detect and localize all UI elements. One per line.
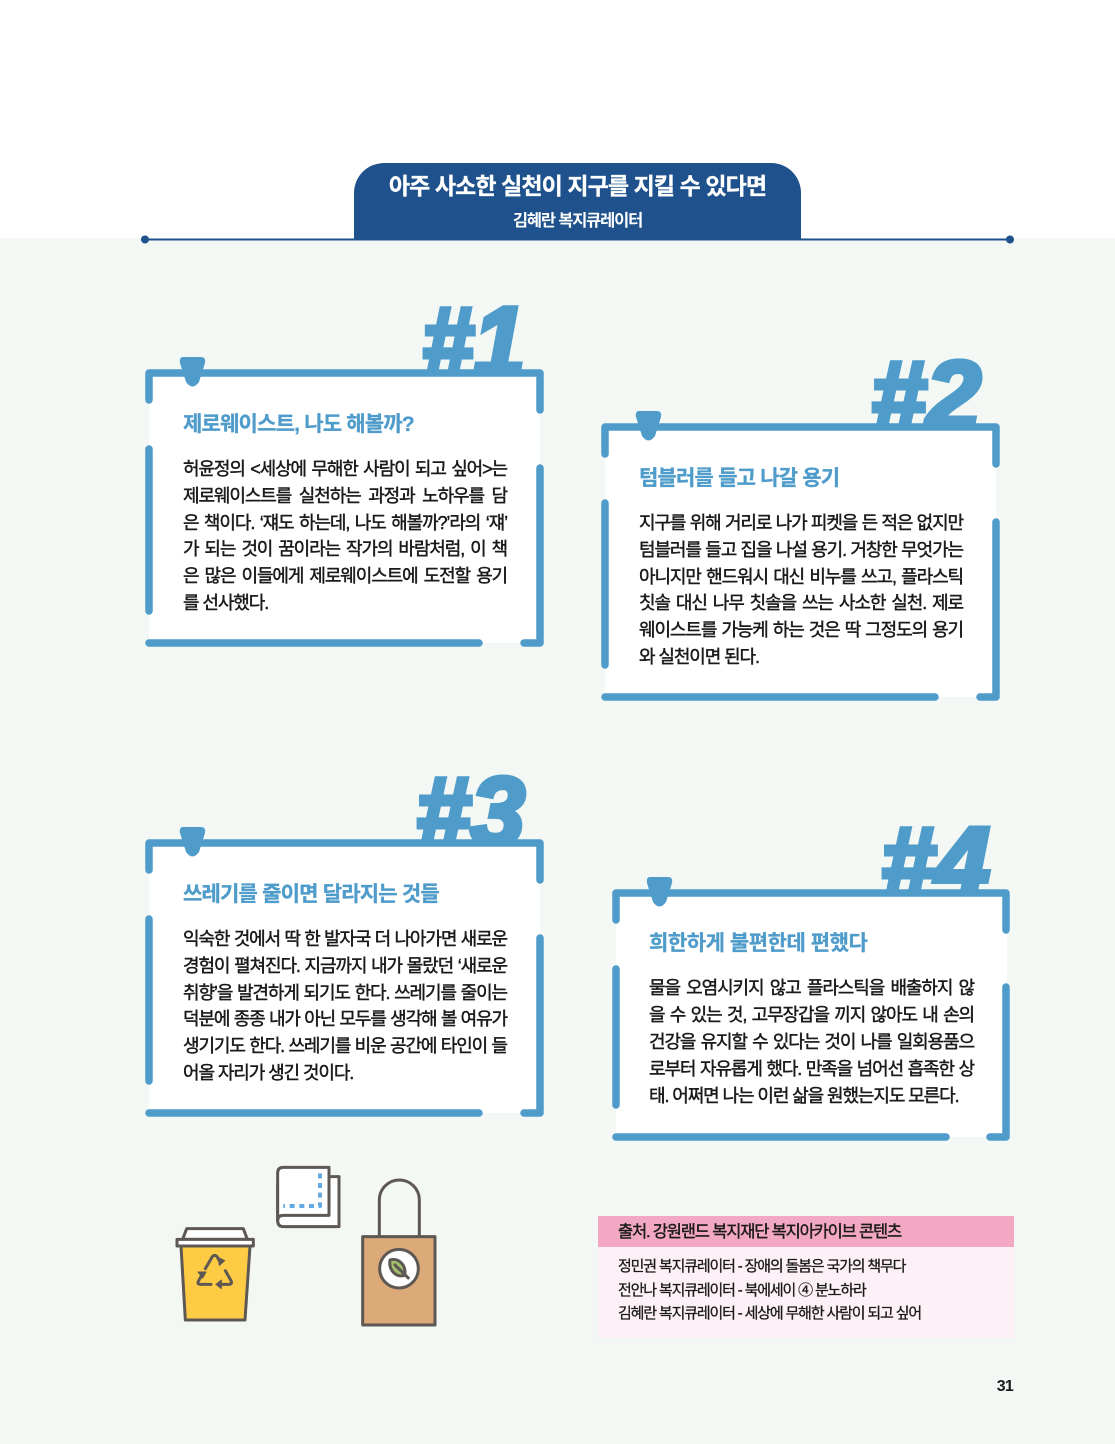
panel: card 3 — [145, 757, 544, 1117]
number 3: #3 — [416, 757, 525, 866]
panel: card 1: 허윤정의 <세상에 무해한 사람이 되고 싶어>는 — [183, 459, 507, 479]
panel: card 2 — [601, 341, 1000, 701]
panel: card 4: 태. 어쩌면 나는 이런 삶을 원했는지도 모른다. — [649, 1086, 958, 1106]
panel: card 1: 은 많은 이들에게 제로웨이스트에 도전할 용기 — [183, 566, 507, 586]
body text — [183, 459, 508, 613]
panel: card 1: 를 선사했다. — [183, 593, 268, 613]
source line 3: 김혜란 복지큐레이터 - 세상에 무해한 사람이 되고 싶어 — [618, 1305, 921, 1322]
panel: card 4: 을 수 있는 것, 고무장갑을 끼지 않아도 내 손의 — [649, 1005, 974, 1025]
body text — [183, 929, 508, 1083]
icon: folded towel — [278, 1167, 339, 1227]
panel: card 3: 어올 자리가 생긴 것이다. — [183, 1063, 353, 1083]
panel: card 3: 경험이 펼쳐진다. 지금까지 내가 몰랐던 ‘새로운 — [183, 956, 507, 976]
header rule with end dots — [141, 236, 1014, 244]
panel: card 4 — [612, 807, 1010, 1141]
heading: 희한하게 불편한데 편했다 — [649, 932, 867, 955]
panel: card 3: 취향’을 발견하게 되기도 한다. 쓰레기를 줄이는 — [183, 983, 507, 1003]
panel: source box — [598, 1216, 1014, 1338]
panel: card 3: 덕분에 종종 내가 아닌 모두를 생각해 볼 여유가 — [183, 1009, 507, 1029]
source header — [598, 1216, 1014, 1247]
source header: 출처. 강원랜드 복지재단 복지아카이브 콘텐츠 — [618, 1223, 901, 1241]
panel: card 3: 익숙한 것에서 딱 한 발자국 더 나아가면 새로운 — [183, 929, 507, 949]
source line 2: 전안나 복지큐레이터 - 북에세이 ④ 분노하라 — [618, 1282, 866, 1299]
title: 아주 사소한 실천이 지구를 지킬 수 있다면 — [389, 173, 766, 199]
body text — [639, 513, 964, 667]
heading: 쓰레기를 줄이면 달라지는 것들 — [183, 883, 439, 906]
panel: card 2: 와 실천이면 된다. — [639, 647, 759, 667]
panel: card 1: 가 되는 것이 꿈이라는 작가의 바람처럼, 이 책 — [183, 539, 507, 559]
panel: card 2: 텀블러를 들고 집을 나설 용기. 거창한 무엇가는 — [639, 540, 963, 560]
panel: card 4: 건강을 유지할 수 있다는 것이 나를 일회용품으 — [649, 1032, 974, 1052]
number 1: #1 — [422, 287, 525, 396]
panel: card 2: 칫솔 대신 나무 칫솔을 쓰는 사소한 실천. 제로 — [639, 593, 963, 613]
heading: 텀블러를 들고 나갈 용기 — [639, 467, 839, 490]
icon: tote bag — [363, 1180, 435, 1325]
panel: card 4: 물을 오염시키지 않고 플라스틱을 배출하지 않 — [649, 978, 974, 998]
page number: 31 — [997, 1378, 1013, 1395]
panel: card 4: 로부터 자유롭게 했다. 만족을 넘어선 흡족한 상 — [649, 1059, 974, 1079]
body text — [649, 978, 975, 1106]
icons: cup, towel, bag — [176, 1166, 436, 1326]
panel: card 2: 지구를 위해 거리로 나가 피켓을 든 적은 없지만 — [639, 513, 963, 533]
panel: card 2: 아니지만 핸드워시 대신 비누를 쓰고, 플라스틱 — [639, 567, 963, 587]
panel: card 1: 제로웨이스트를 실천하는 과정과 노하우를 담 — [183, 486, 507, 506]
source line 1: 정민권 복지큐레이터 - 장애의 돌봄은 국가의 책무다 — [618, 1258, 905, 1275]
panel: card 3: 생기기도 한다. 쓰레기를 비운 공간에 타인이 들 — [183, 1036, 507, 1056]
number 2: #2 — [871, 341, 981, 450]
number 4: #4 — [881, 807, 990, 916]
panel: card 2: 웨이스트를 가능케 하는 것은 딱 그정도의 용기 — [639, 620, 963, 640]
author: 김혜란 복지큐레이터 — [513, 212, 642, 230]
panel: card 1: 은 책이다. ‘쟤도 하는데, 나도 해볼까?’라의 ‘쟤’ — [183, 513, 507, 533]
panel: card 1 — [145, 287, 544, 647]
heading: 제로웨이스트, 나도 해볼까? — [183, 413, 414, 436]
icon: recycling cup — [177, 1229, 253, 1320]
header tab with title — [354, 163, 801, 240]
